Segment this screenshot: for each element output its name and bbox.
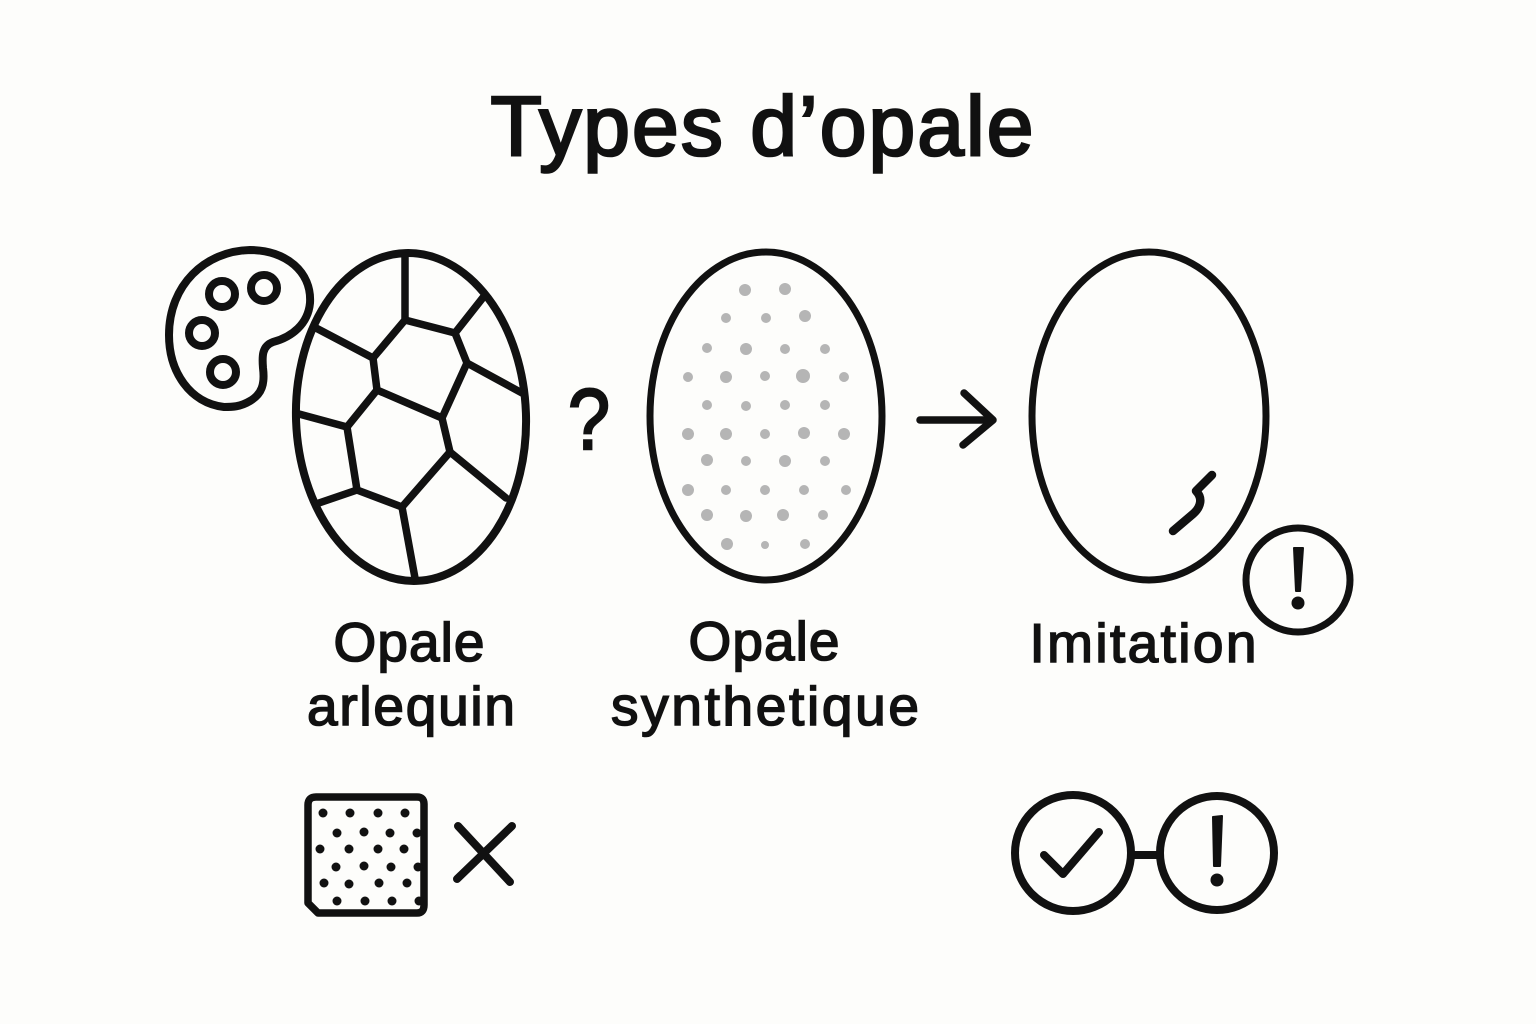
icon: cross — [457, 826, 512, 882]
icon: check and warning pair — [1015, 795, 1274, 911]
label: opale synthetique: Opale — [688, 610, 840, 672]
label: imitation: Imitation — [1030, 612, 1256, 674]
icon: warning circle — [1246, 528, 1350, 632]
icon: imitation opal — [1032, 252, 1266, 580]
label: opale arlequin: arlequin — [307, 675, 515, 737]
label: opale arlequin — [307, 611, 515, 737]
question mark: ? — [568, 372, 610, 468]
icon: synthetic opal — [650, 252, 882, 580]
label: opale arlequin: Opale — [334, 611, 484, 673]
icon: harlequin opal — [290, 249, 532, 585]
icon: palette — [169, 250, 310, 407]
title: Types d’opale — [490, 79, 1034, 173]
square dots — [316, 808, 424, 906]
label: opale synthetique: synthetique — [611, 675, 919, 737]
icon: dotted square — [308, 797, 424, 913]
arrow — [920, 393, 993, 445]
crack — [1173, 475, 1212, 531]
label: opale synthetique — [611, 610, 919, 737]
dot pattern — [682, 283, 851, 550]
